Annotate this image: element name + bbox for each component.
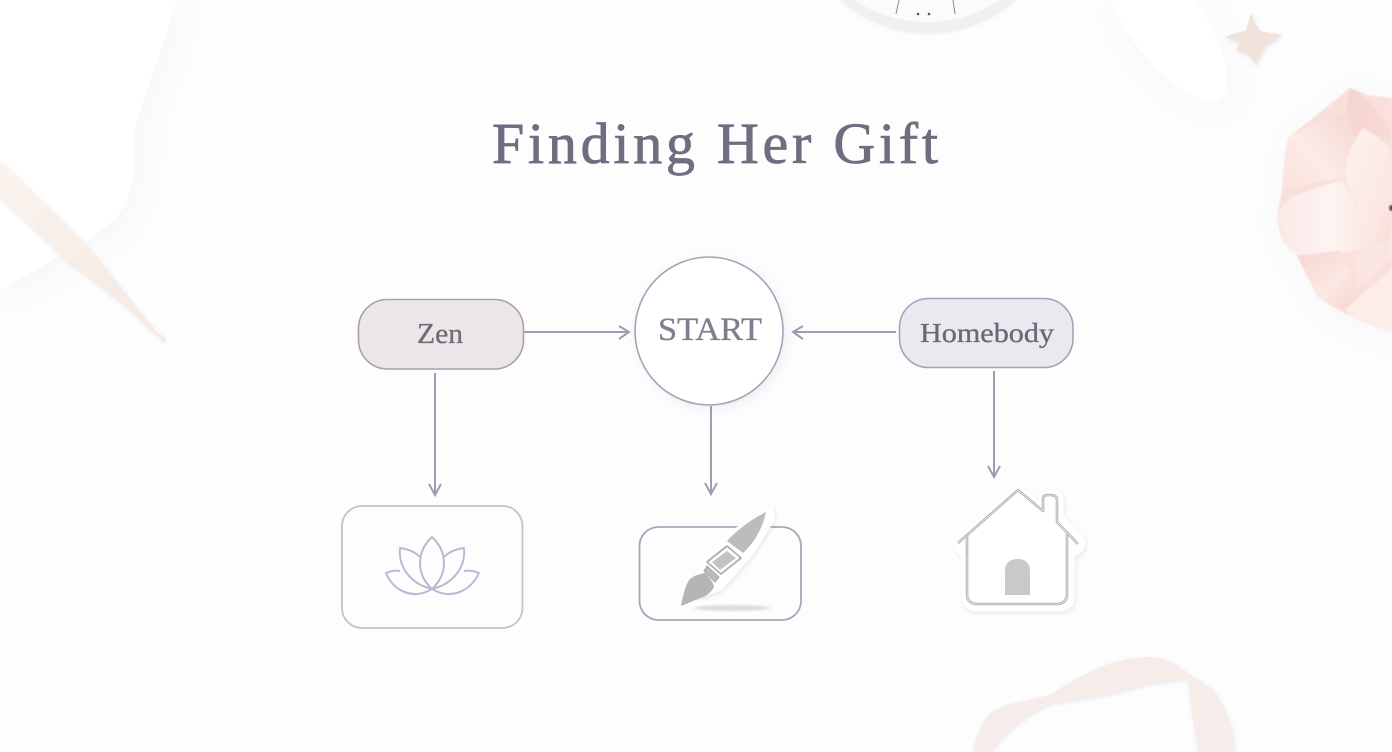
- node: Zen: Zen: [417, 319, 463, 350]
- arrow: Zen to START: [524, 326, 629, 339]
- title: Finding Her Gift: [492, 111, 938, 176]
- decoration: wooden stick: [0, 160, 166, 342]
- shadow under brush: [694, 605, 770, 611]
- icon: paintbrush: [681, 506, 775, 606]
- decoration: white stone: [1112, 0, 1227, 101]
- node: Homebody: [900, 298, 1073, 368]
- outcome: brush card: [640, 506, 801, 620]
- icon: house sticker: [956, 486, 1084, 610]
- arrow: Homebody to START: [793, 326, 896, 339]
- node: Homebody: Homebody: [920, 318, 1055, 348]
- decoration: pink rose: [1277, 88, 1392, 333]
- arrow: Zen to lotus: [429, 373, 441, 495]
- decoration: star: [1225, 13, 1282, 64]
- node: START: [635, 257, 783, 405]
- arrow: START to brush: [705, 406, 717, 494]
- outcome: lotus card: [342, 506, 522, 628]
- decoration: plate: [795, 0, 1059, 31]
- icon: lotus: [386, 537, 479, 594]
- arrow: Homebody to house: [988, 371, 1000, 477]
- decoration: ribbon: [973, 657, 1234, 752]
- decoration: white cloth: [0, 0, 176, 291]
- node: START: START: [658, 312, 762, 348]
- node: Zen: [358, 300, 524, 369]
